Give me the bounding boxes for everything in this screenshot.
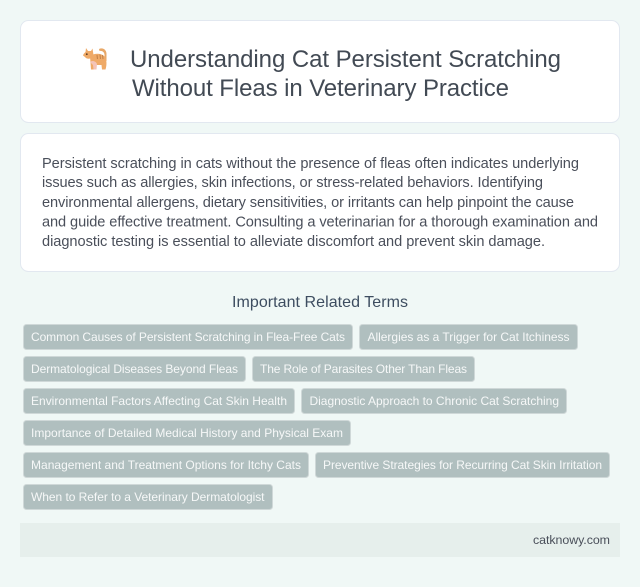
summary text: and guide effective treatment. Consulting a veterinarian for a thorough examination and [42,214,598,230]
tag: parasites [252,356,474,382]
tag: management and treatment: Management and Treatment Options for Itchy Cats [31,458,301,472]
footer source text: catknowy.com [533,533,610,547]
panel: summary [20,134,620,272]
tag: medical history [24,420,350,446]
tag: environmental factors: Environmental Factors Affecting Cat Skin Health [31,394,287,408]
tag: allergies: Allergies as a Trigger for Cat Itchiness [368,330,570,344]
title [130,46,561,102]
icon: cat [83,48,107,70]
summary text [42,156,598,250]
tag: management and treatment [24,452,308,478]
footer [20,523,620,557]
summary text: Persistent scratching in cats without the presence of fleas often indicates underlying [42,156,579,172]
panel: title header [20,20,620,122]
tag: dermatological diseases: Dermatological Diseases Beyond Fleas [31,362,238,376]
tag: medical history: Importance of Detailed Medical History and Physical Exam [31,426,343,440]
tag: diagnostic approach [302,388,566,414]
tag: parasites: The Role of Parasites Other Than Fleas [260,362,467,376]
tag: allergies [360,324,578,350]
title: Without Fleas in Veterinary Practice [132,75,509,102]
tag: veterinary dermatologist [24,484,272,510]
tag: preventive strategies: Preventive Strategies for Recurring Cat Skin Irritation [323,458,602,472]
summary text: diagnostic testing is essential to alleviate discomfort and prevent skin damage. [42,234,545,250]
tag: veterinary dermatologist: When to Refer to a Veterinary Dermatologist [31,490,265,504]
tag: preventive strategies [316,452,610,478]
panel: related terms tags [24,324,610,510]
tag: dermatological diseases [24,356,246,382]
heading: important related terms: Important Related Terms [232,294,408,311]
title: Understanding Cat Persistent Scratching [130,46,561,73]
tag: environmental factors [24,388,294,414]
tag: common causes: Common Causes of Persistent Scratching in Flea-Free Cats [31,330,345,344]
summary text: environmental allergens, dietary sensitivities, or irritants can help pinpoint the cause [42,195,574,211]
tag: diagnostic approach: Diagnostic Approach to Chronic Cat Scratching [310,394,559,408]
summary text: issues such as allergies, skin infections, or stress-related behaviors. Identifying [42,175,543,191]
tag: common causes [24,324,352,350]
